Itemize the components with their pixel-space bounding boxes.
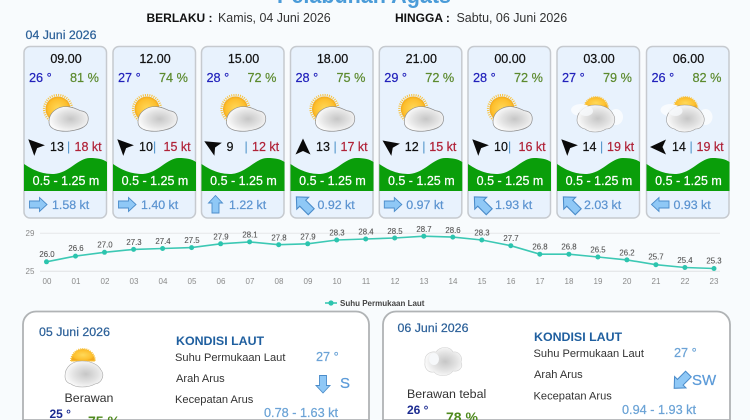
- time: 09.00: [50, 52, 82, 66]
- icon: current arrow: [118, 198, 136, 212]
- data value labels: 28.6: [445, 226, 461, 235]
- current speed range: 0.94 - 1.93 kt: [622, 403, 697, 417]
- icon: current arrow: [290, 191, 317, 218]
- panel: 06 Juni forecast: [383, 312, 730, 420]
- icon: current arrow: [30, 198, 47, 212]
- separator: |: [153, 140, 156, 154]
- icon: partly cloudy: [399, 95, 444, 131]
- sea condition heading: KONDISI LAUT: [534, 330, 623, 344]
- icon: wind arrow: [378, 134, 400, 156]
- current speed: 2.03 kt: [584, 198, 622, 212]
- separator: |: [334, 140, 337, 154]
- icon: heavy cloud: [425, 348, 462, 376]
- wave band: [290, 158, 374, 191]
- wind speed: 14: [672, 140, 686, 154]
- time: 18.00: [317, 52, 348, 66]
- humidity: 81 %: [70, 71, 99, 85]
- humidity: 72 %: [514, 71, 543, 85]
- icon: current arrow: [652, 198, 669, 212]
- icon: current direction arrow: [668, 368, 694, 394]
- wave height: 0.5 - 1.25 m: [122, 174, 188, 188]
- x axis labels: 16: [507, 277, 516, 286]
- data value labels: 26.6: [68, 244, 84, 253]
- data value labels: 27.8: [271, 234, 287, 242]
- date: 05 Juni 2026: [39, 325, 110, 339]
- humidity: 72 %: [248, 71, 276, 85]
- temperature: 26 °: [652, 71, 674, 85]
- data value labels: 25.7: [648, 252, 664, 262]
- wind gust: 18 kt: [74, 140, 102, 154]
- wind gust: 15 kt: [164, 140, 191, 154]
- data value labels: 28.4: [358, 228, 374, 236]
- current speed: 1.22 kt: [229, 198, 267, 212]
- panel: 21.00 forecast: [378, 46, 462, 218]
- panel: 15.00 forecast: [201, 46, 284, 218]
- x axis labels: 17: [536, 277, 545, 286]
- icon: current arrow: [557, 191, 584, 218]
- y axis labels: 25: [26, 267, 35, 276]
- data value labels: 26.8: [561, 242, 577, 252]
- data value labels: 28.3: [474, 228, 490, 238]
- date: 06 Juni 2026: [398, 321, 469, 335]
- time: 06.00: [673, 52, 704, 66]
- humidity: 72 %: [425, 71, 454, 85]
- data value labels: 25.4: [677, 256, 693, 265]
- weather description: Berawan: [65, 391, 114, 405]
- current speed: 0.92 kt: [318, 198, 355, 212]
- wind gust: 16 kt: [518, 140, 546, 154]
- icon: partly cloudy: [488, 95, 532, 131]
- icon: wind arrow: [112, 134, 134, 156]
- icon: wind arrow: [201, 135, 222, 156]
- data value labels: 28.5: [387, 227, 403, 236]
- data value labels: 27.4: [155, 237, 171, 246]
- temperature: 28 °: [296, 71, 318, 85]
- wave band: [379, 158, 462, 191]
- data value labels: 26.8: [532, 242, 548, 252]
- icon: wind arrow: [296, 138, 310, 154]
- icon: cloudy with sun: [571, 97, 623, 132]
- temperature: 27 °: [562, 71, 585, 85]
- wave band: [113, 158, 196, 191]
- x axis labels: 06: [217, 277, 226, 286]
- valid from: BERLAKU :: [146, 11, 212, 25]
- x axis labels: 00: [43, 277, 52, 286]
- sea surface temperature label: Suhu Permukaan Laut: [175, 352, 285, 364]
- icon: partly cloudy: [310, 95, 355, 131]
- x axis labels: 10: [333, 277, 342, 286]
- humidity: 79 %: [603, 71, 632, 85]
- x axis labels: 19: [594, 277, 603, 286]
- wind speed: 14: [582, 140, 596, 154]
- time: 15.00: [228, 52, 259, 66]
- wave height: 0.5 - 1.25 m: [210, 174, 277, 188]
- humidity: 74 %: [159, 71, 188, 85]
- data value labels: 28.7: [416, 225, 432, 234]
- wave band: [468, 158, 551, 191]
- panel: 03.00 forecast: [556, 46, 640, 218]
- x axis labels: 05: [188, 277, 197, 286]
- time: 21.00: [406, 52, 437, 66]
- x axis labels: 02: [101, 277, 110, 286]
- valid until date: Sabtu, 06 Juni 2026: [456, 11, 567, 25]
- current speed: 1.40 kt: [141, 198, 179, 212]
- time: 12.00: [139, 52, 171, 66]
- x axis labels: 07: [246, 277, 255, 286]
- temperature: 27 °: [118, 71, 141, 85]
- wind speed: 9: [226, 140, 234, 154]
- data value labels: 27.0: [97, 240, 113, 250]
- data value labels: 26.0: [39, 250, 55, 259]
- current speed label: Kecepatan Arus: [175, 394, 254, 406]
- icon: current direction arrow: [316, 376, 330, 393]
- x axis labels: 04: [159, 277, 168, 286]
- temperature: 28 °: [473, 71, 496, 85]
- temperature: 28 °: [206, 71, 229, 85]
- wind speed: 10: [494, 140, 508, 154]
- icon: wind arrow: [650, 140, 666, 154]
- panel: 06.00 forecast: [646, 46, 730, 218]
- x axis labels: 11: [362, 277, 371, 286]
- date heading: 04 Juni 2026: [26, 28, 97, 42]
- separator: |: [67, 140, 70, 154]
- y axis labels: [26, 229, 35, 276]
- separator: |: [690, 140, 693, 154]
- data value labels: 27.9: [300, 232, 316, 242]
- valid until: HINGGA :: [395, 11, 450, 25]
- wind speed: 13: [316, 140, 330, 154]
- wind speed: 10: [139, 140, 153, 154]
- icon: partly cloudy: [222, 95, 266, 131]
- wave band: [24, 158, 107, 191]
- icon: partly cloudy: [44, 95, 88, 131]
- wave band: [202, 158, 284, 191]
- wind gust: 15 kt: [429, 140, 457, 154]
- data value labels: 26.5: [590, 246, 606, 254]
- data value labels: [39, 225, 722, 266]
- icon: current arrow: [384, 198, 402, 212]
- temperature: 26 °: [29, 71, 52, 85]
- x axis labels: 22: [681, 277, 690, 286]
- current direction: S: [340, 375, 350, 392]
- panel: 18.00 forecast: [290, 46, 374, 218]
- panel: 09.00 forecast: [23, 46, 107, 218]
- data value labels: 27.3: [126, 238, 142, 247]
- current speed: 0.97 kt: [406, 198, 444, 212]
- wave height: 0.5 - 1.25 m: [477, 174, 543, 188]
- panel: 00.00 forecast: [467, 46, 551, 218]
- wind speed: 12: [405, 140, 419, 154]
- valid from date: Kamis, 04 Juni 2026: [218, 11, 331, 25]
- current speed: 1.58 kt: [52, 198, 90, 212]
- sea surface temperature label: Suhu Permukaan Laut: [534, 348, 644, 360]
- panel: 05 Juni forecast: [23, 312, 369, 420]
- current speed: 1.93 kt: [495, 198, 533, 212]
- x axis labels: 21: [652, 277, 661, 286]
- separator: |: [508, 140, 511, 154]
- weather description: Berawan tebal: [407, 387, 486, 401]
- x axis labels: 01: [72, 277, 81, 286]
- x axis labels: 20: [623, 277, 632, 286]
- icon: partly cloudy: [133, 95, 177, 131]
- wave height: 0.5 - 1.25 m: [33, 174, 99, 188]
- separator: |: [422, 140, 426, 154]
- time: 00.00: [494, 52, 526, 66]
- data value labels: 27.7: [503, 234, 519, 243]
- x axis labels: 23: [710, 277, 719, 286]
- validity header: [146, 11, 567, 25]
- humidity: 82 %: [692, 71, 721, 85]
- wave band: [557, 158, 640, 191]
- wave height: 0.5 - 1.25 m: [655, 174, 722, 188]
- data value labels: 27.5: [184, 236, 200, 245]
- wave height: 0.5 - 1.25 m: [388, 174, 455, 188]
- sea condition heading: KONDISI LAUT: [176, 334, 265, 348]
- wind speed: 13: [50, 140, 64, 154]
- separator: |: [244, 140, 248, 154]
- wind gust: 19 kt: [607, 140, 635, 154]
- data value labels: 27.9: [213, 232, 229, 242]
- panel: 12.00 forecast: [112, 46, 196, 218]
- current speed label: Kecepatan Arus: [534, 390, 612, 402]
- time: 03.00: [583, 52, 615, 66]
- icon: wind arrow: [467, 134, 489, 156]
- data value labels: 26.2: [619, 248, 635, 258]
- x axis labels: 13: [420, 277, 429, 286]
- data value labels: 25.3: [706, 256, 722, 266]
- icon: wind arrow: [23, 134, 45, 156]
- y axis labels: 29: [26, 229, 35, 238]
- icon: cloudy with sun: [660, 97, 712, 132]
- wave height: 0.5 - 1.25 m: [566, 174, 632, 188]
- data value labels: 28.1: [242, 230, 258, 240]
- icon: current arrow: [208, 196, 222, 213]
- current direction: SW: [692, 372, 717, 389]
- temperature: 29 °: [384, 71, 407, 85]
- wind gust: 17 kt: [340, 140, 368, 154]
- x axis labels: 03: [130, 277, 139, 286]
- wind gust: 19 kt: [696, 140, 724, 154]
- current direction label: Arah Arus: [176, 373, 225, 385]
- wave height: 0.5 - 1.25 m: [299, 174, 366, 188]
- current speed: 0.93 kt: [674, 198, 711, 212]
- chart legend: Suhu Permukaan Laut: [340, 299, 425, 308]
- x axis labels: 12: [391, 277, 400, 286]
- wind gust: 12 kt: [252, 140, 280, 154]
- line chart: sea surface temperature: [26, 225, 722, 286]
- data value labels: 28.3: [329, 228, 345, 238]
- current direction label: Arah Arus: [534, 369, 583, 381]
- separator: |: [600, 140, 603, 154]
- temperature line: [46, 236, 714, 268]
- sea surface temperature value: 27 °: [674, 346, 697, 360]
- x axis labels: 18: [565, 277, 574, 286]
- current speed range: 0.78 - 1.63 kt: [264, 406, 339, 420]
- temperature: 26 °: [407, 403, 429, 417]
- x axis labels: 15: [478, 277, 487, 286]
- icon: wind arrow: [556, 134, 578, 156]
- humidity: 75 %: [336, 71, 365, 85]
- wave band: [646, 158, 730, 191]
- sea surface temperature value: 27 °: [316, 350, 339, 364]
- x axis labels: 14: [449, 277, 458, 286]
- x axis labels: 08: [275, 277, 284, 286]
- icon: current arrow: [468, 191, 495, 218]
- x axis labels: [43, 277, 719, 286]
- x axis labels: 09: [304, 277, 313, 286]
- icon: cloudy with sun: [65, 349, 103, 387]
- data points: [44, 234, 716, 271]
